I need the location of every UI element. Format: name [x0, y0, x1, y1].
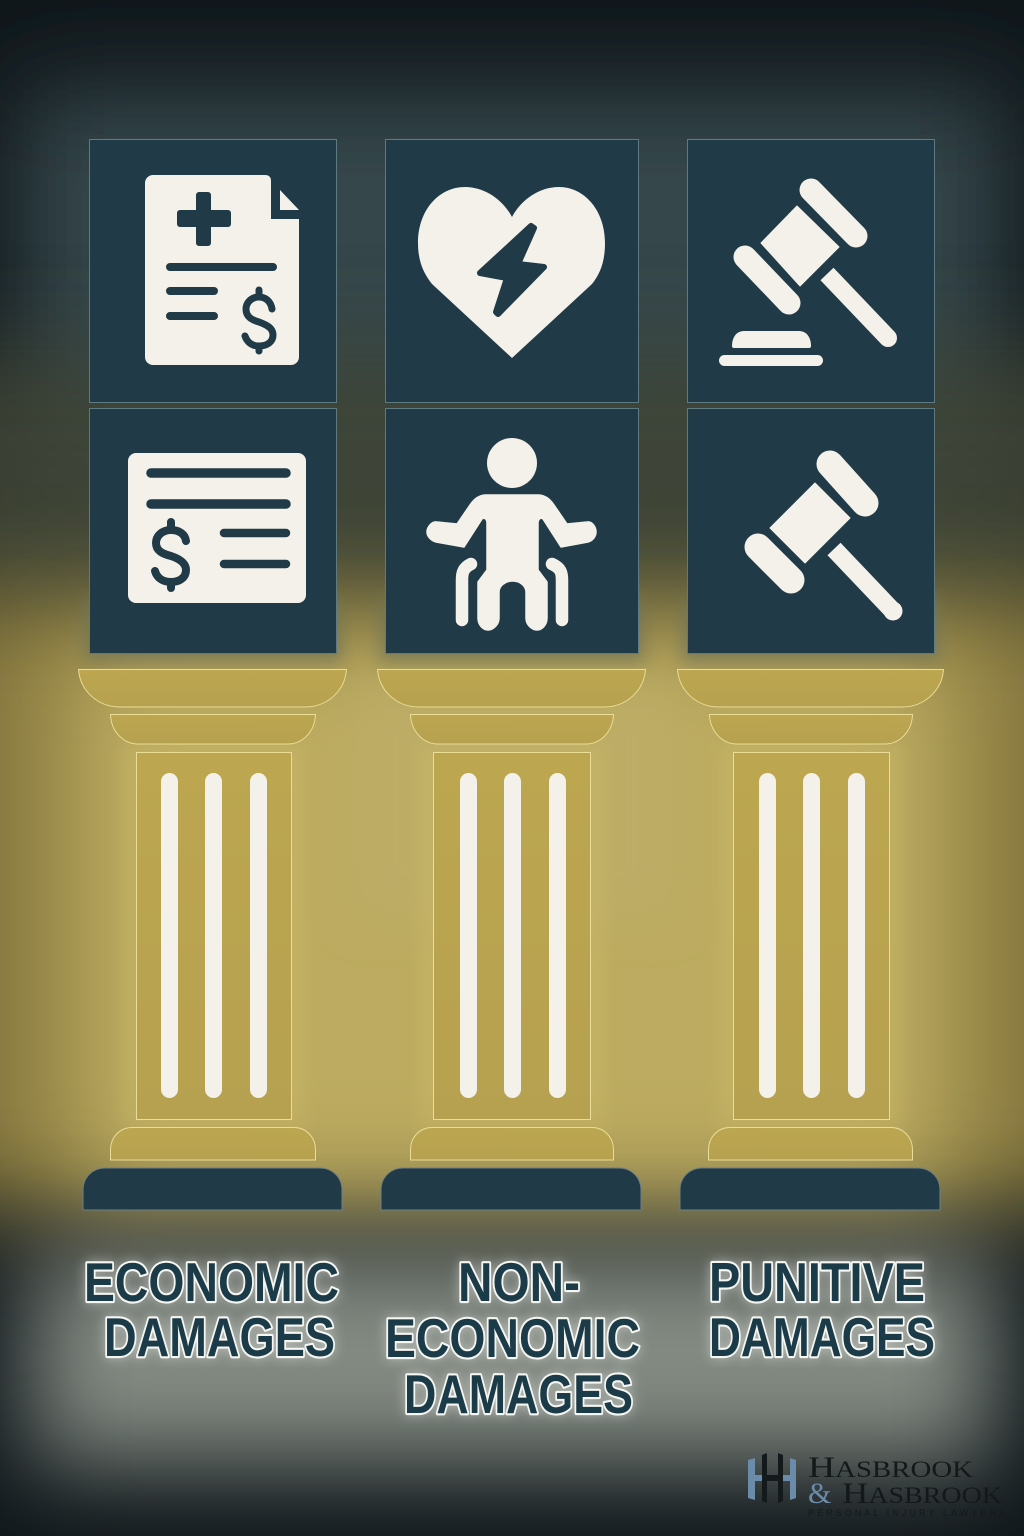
label: punitive damages: PUNITIVE — [709, 1251, 925, 1313]
panel bottom glow — [84, 600, 940, 662]
label: non-economic damages: ECONOMIC — [385, 1307, 640, 1369]
panel: non-economic icons — [386, 140, 638, 654]
logo tagline: PERSONAL INJURY LAWYERS — [808, 1508, 1005, 1518]
label: economic damages — [84, 1251, 339, 1368]
icon tile: gavel with sound block — [688, 140, 934, 402]
pillar: economic — [78, 670, 346, 1210]
icon tile: injured seated person — [386, 408, 638, 654]
panel: punitive icons — [688, 140, 934, 654]
label: non-economic damages: NON- — [458, 1251, 580, 1313]
label: economic damages: DAMAGES — [104, 1306, 335, 1368]
logo mark — [748, 1453, 796, 1503]
icon tile: heart with lightning bolt — [386, 140, 638, 402]
panel: economic icons — [90, 140, 336, 654]
pillar glows — [120, 745, 904, 1130]
logo: Hasbrook & Hasbrook — [748, 1451, 1005, 1518]
label: punitive damages — [709, 1251, 935, 1368]
logo wordmark: first line: HASBROOK — [808, 1451, 973, 1484]
pillar: non-economic — [378, 670, 646, 1210]
logo wordmark: second line: HASBROOK — [842, 1477, 1002, 1510]
label: non-economic damages: DAMAGES — [404, 1363, 633, 1425]
pillar: punitive — [678, 670, 944, 1210]
logo wordmark: second line: & — [808, 1477, 831, 1510]
icon tile: gavel — [688, 408, 934, 654]
label: economic damages: ECONOMIC — [84, 1251, 339, 1313]
icon tile: invoice — [90, 408, 336, 654]
icon tile: medical bill — [90, 140, 336, 402]
label: punitive damages: DAMAGES — [709, 1306, 935, 1368]
label: non-economic damages — [385, 1251, 640, 1425]
